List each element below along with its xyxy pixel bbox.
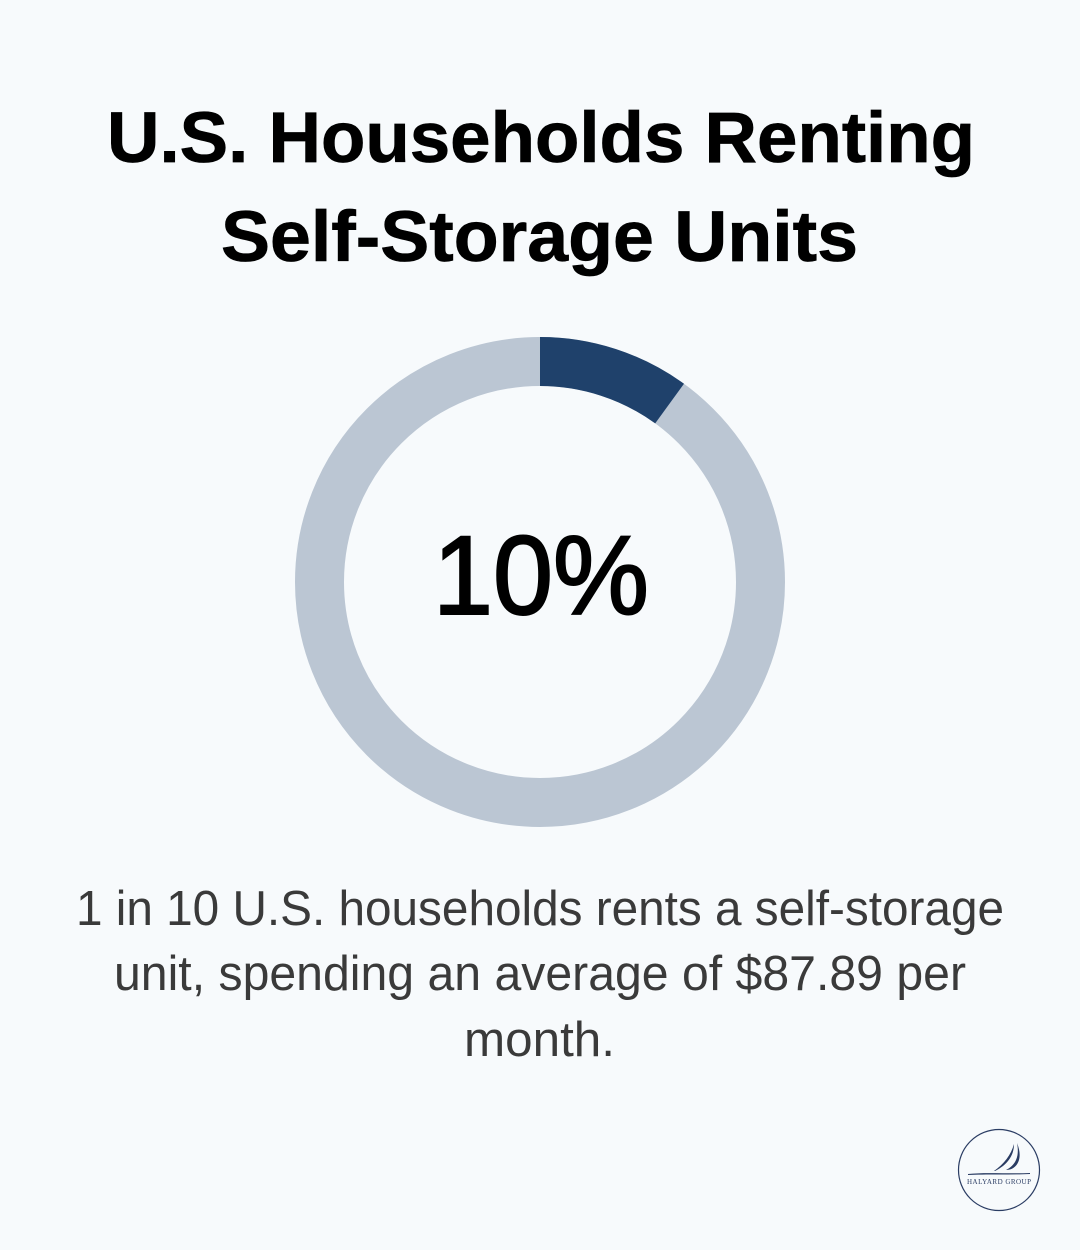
ring track xyxy=(320,362,760,802)
icon: sailboat xyxy=(968,1143,1030,1175)
description text xyxy=(76,882,1004,1067)
logo: Halyard Group xyxy=(958,1130,1040,1210)
logo wordmark: HALYARD GROUP xyxy=(967,1178,1031,1186)
description text: 1 in 10 U.S. households rents a self-storage xyxy=(76,882,1004,936)
title xyxy=(107,99,975,277)
center value: 10% xyxy=(433,513,649,638)
logo ring xyxy=(958,1130,1040,1210)
title: Self-Storage Units xyxy=(221,198,858,277)
donut chart: 10 percent xyxy=(320,362,760,802)
description text: month. xyxy=(464,1013,615,1067)
title: U.S. Households Renting xyxy=(107,99,975,178)
description text: unit, spending an average of $87.89 per xyxy=(114,947,966,1001)
ring highlighted segment xyxy=(540,362,670,404)
